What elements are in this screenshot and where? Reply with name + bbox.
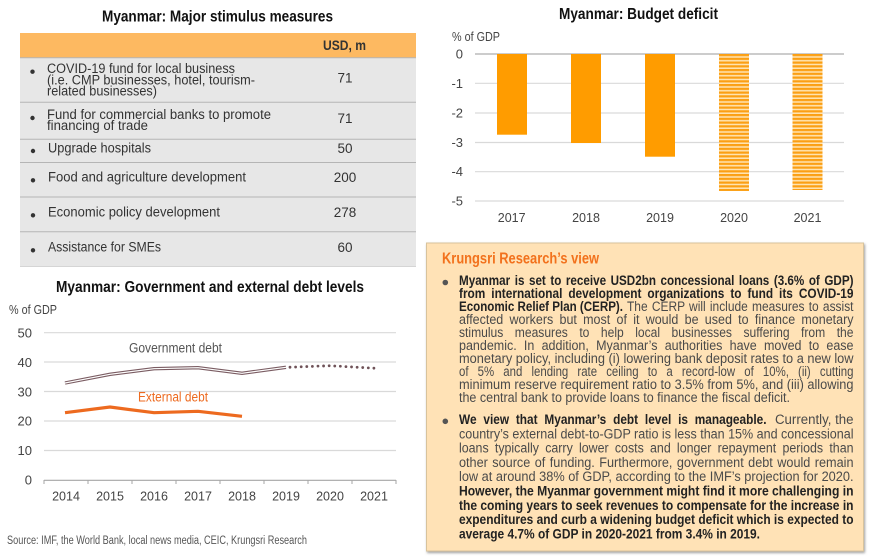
y axis labels: -5 <box>451 194 463 208</box>
row: economic policy <box>31 204 356 220</box>
y axis labels: -2 <box>451 106 463 120</box>
bars: forecast <box>719 54 822 191</box>
y axis labels: 40 <box>18 355 32 370</box>
x axis labels: 2021 <box>360 490 388 504</box>
y axis labels: 30 <box>18 384 32 400</box>
row: commercial banks fund: financing of trade <box>47 118 148 133</box>
x axis labels: 2016 <box>140 490 168 504</box>
x axis labels: 2021 <box>794 211 821 225</box>
paragraph: concessional loans: affected workers but most of it would be used to finance monetary <box>459 312 854 327</box>
paragraph: concessional loans: the central bank to provide loans to finance the fiscal deficit. <box>459 390 790 405</box>
row: upgrade hospitals <box>31 140 353 156</box>
paragraph: debt level: We view that Myanmar’s debt level is manageable. <box>459 412 766 427</box>
y axis labels <box>18 326 32 488</box>
table header: USD, m <box>323 38 366 53</box>
y axis labels: 50 <box>18 326 32 340</box>
paragraph: debt level: Currently, the <box>775 412 854 427</box>
x axis labels: 2019 <box>646 211 674 225</box>
row: upgrade hospitals: Upgrade hospitals <box>48 140 151 156</box>
axis unit: % of GDP <box>452 29 500 44</box>
row: COVID-19 fund: related businesses) <box>47 84 157 98</box>
row: food and agriculture: 200 <box>334 170 356 185</box>
y axis labels: -1 <box>451 76 463 91</box>
x axis labels: 2018 <box>228 490 256 504</box>
x axis labels: 2017 <box>184 490 212 504</box>
x axis labels <box>52 490 388 504</box>
paragraph: concessional loans: minimum reserve requirement ratio to 3.5% from 5%, and (iii) allowing <box>459 377 854 392</box>
panel: stimulus measures table <box>20 33 416 266</box>
x axis labels: 2019 <box>272 490 300 504</box>
paragraph: debt level: average 4.7% of GDP in 2020-2021 from 3.4% in 2019. <box>459 526 760 542</box>
row: upgrade hospitals: 50 <box>337 141 353 156</box>
table header <box>20 33 416 58</box>
line: government debt <box>65 366 376 383</box>
row: commercial banks fund: Fund for commercial banks to promote <box>47 107 271 122</box>
paragraph: concessional loans: monetary policy, including (i) lowering bank deposit rates to a new low <box>459 351 854 366</box>
row: commercial banks fund <box>30 107 353 133</box>
title: stimulus measures: Myanmar: Major stimulus measures <box>102 8 333 26</box>
y axis labels <box>451 46 463 208</box>
y axis labels: 10 <box>18 443 32 458</box>
row: food and agriculture: Food and agriculture development <box>48 170 246 184</box>
panel: Krungsri Research's view <box>426 243 864 551</box>
paragraph: concessional loans: pandemic. In addition, Myanmar’s authorities have moved to ease <box>459 338 854 353</box>
x axis labels: 2018 <box>572 211 600 225</box>
y axis labels: -4 <box>451 164 463 179</box>
row: COVID-19 fund: COVID-19 fund for local business <box>47 61 235 76</box>
x axis labels: 2014 <box>52 490 80 504</box>
x axis labels: 2020 <box>316 490 344 504</box>
y axis labels: 20 <box>18 414 32 428</box>
title: debt levels: Myanmar: Government and external debt levels <box>56 279 364 296</box>
paragraph: concessional loans <box>442 273 854 405</box>
y axis labels: -3 <box>451 135 463 150</box>
paragraph: debt level: country’s external debt-to-GDP ratio is less than 15% and concessional <box>459 426 854 441</box>
panel heading: Krungsri Research’s view <box>442 250 600 268</box>
source note: Source: IMF, the World Bank, local news media, CEIC, Krungsri Research <box>7 535 307 547</box>
label: external debt: External debt <box>138 390 208 405</box>
y axis labels: 0 <box>456 46 463 62</box>
row: COVID-19 fund: 71 <box>337 70 353 86</box>
axis unit: % of GDP <box>9 302 57 317</box>
row: SMEs: 60 <box>337 240 353 255</box>
x axis labels: 2017 <box>498 211 526 225</box>
paragraph: debt level <box>442 412 854 542</box>
x axis labels <box>498 211 821 225</box>
row: COVID-19 fund: (i.e. CMP businesses, hotel, tourism- <box>47 72 255 88</box>
row: food and agriculture <box>31 170 356 185</box>
row: economic policy: Economic policy development <box>48 204 220 220</box>
row: SMEs <box>31 240 353 255</box>
bar chart: budget deficit <box>451 29 844 225</box>
line: external debt <box>65 407 242 416</box>
label: government debt: Government debt <box>129 340 222 356</box>
paragraph: concessional loans: Economic Relief Plan (CERP). <box>459 299 623 314</box>
x axis labels: 2020 <box>720 211 748 225</box>
row: commercial banks fund: 71 <box>337 111 353 126</box>
paragraph: debt level: other source of funding. Furthermore, government debt would remain <box>459 455 854 470</box>
x axis labels: 2015 <box>96 490 124 504</box>
paragraph: debt level: low at around 38% of GDP, according to the IMF’s projection for 2020. <box>459 469 854 484</box>
bars: actual <box>497 54 675 157</box>
line chart: government and external debt <box>9 302 396 504</box>
row: economic policy: 278 <box>334 205 356 220</box>
row: COVID-19 fund <box>30 61 353 98</box>
y axis labels: 0 <box>25 472 32 488</box>
row: SMEs: Assistance for SMEs <box>48 240 161 254</box>
title: budget deficit: Myanmar: Budget deficit <box>559 6 718 23</box>
